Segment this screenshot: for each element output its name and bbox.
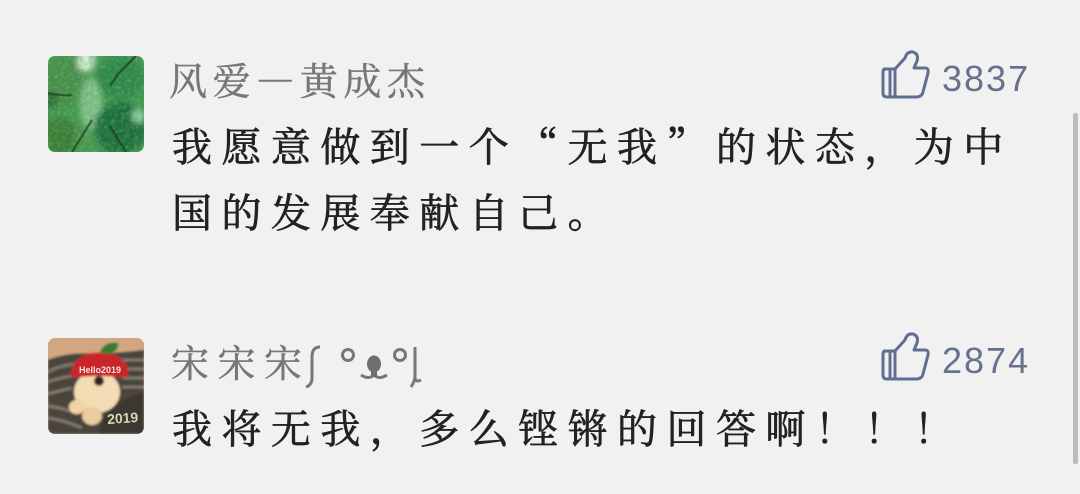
scrollbar xyxy=(1073,113,1078,464)
panel: second comment xyxy=(48,332,1030,455)
avatar: shiba dog with red hat xyxy=(48,338,144,434)
like count: 2874 xyxy=(942,340,1030,381)
comment text xyxy=(172,116,1013,239)
icon: thumbs up xyxy=(882,332,930,380)
comment text: 国的发展奉献自己。 xyxy=(172,182,617,239)
corner text: 2019 xyxy=(107,409,139,427)
comment text: 我愿意做到一个“无我”的状态，为中 xyxy=(172,116,1013,173)
panel: first comment xyxy=(48,50,1030,239)
emoticon xyxy=(306,346,422,388)
comment text: 我将无我，多么铿锵的回答啊！！！ xyxy=(172,398,963,455)
icon: thumbs up xyxy=(882,50,930,98)
commenter name: 宋宋宋 xyxy=(171,333,311,388)
like count: 3837 xyxy=(942,58,1030,99)
like button xyxy=(882,50,1030,99)
commenter name xyxy=(171,333,422,388)
avatar: green bamboo forest xyxy=(48,56,144,152)
commenter name: 风爱—黄成杰 xyxy=(169,51,431,106)
hat text: Hello2019 xyxy=(79,365,121,375)
like button xyxy=(882,332,1030,381)
